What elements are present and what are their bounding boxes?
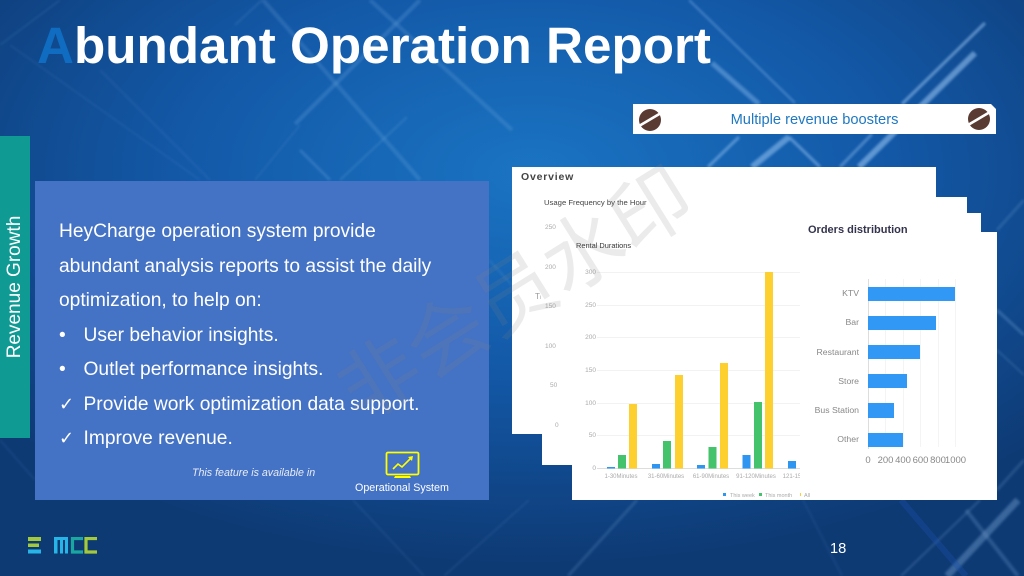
axis labels: y: 300 [585,269,596,276]
banner: Multiple revenue boosters [633,104,996,134]
value axis labels: 600 [913,455,928,466]
text block: description lines: abundant analysis reports to assist the daily [59,256,431,277]
banner: Multiple revenue boosters: Multiple revenue boosters [731,112,898,128]
axis labels: y: 150 [585,367,596,374]
page number: 18 [830,541,846,557]
side tab: Revenue Growth: Revenue Growth [4,216,25,358]
category labels [815,288,860,444]
side tab: Revenue Growth [0,136,30,438]
axis labels on sheet one: 200 [545,264,556,271]
heading: Overview: Overview [521,171,574,183]
report sheet: second layer [542,197,967,465]
heading: Usage Frequency: Usage Frequency by the Hour [544,198,647,207]
chart: orders distribution [800,224,966,499]
text block: description lines: Improve revenue. [84,428,233,449]
bars: orders [868,287,955,447]
text block: description lines: Outlet performance insights. [84,359,323,380]
category labels: KTV [842,288,859,298]
axis labels: x: 31-60Minutes [648,474,684,480]
chart: rental durations bar chart [585,269,800,499]
axis labels on sheet one: 0 [555,422,559,429]
value axis labels: 400 [895,455,911,466]
heading: Rental Durations: Rental Durations [576,241,631,250]
value axis labels [865,455,966,466]
text block: description lines: ✓ [59,394,74,415]
axis labels on sheet one: 150 [545,303,556,310]
text block: description lines: HeyCharge operation system provide [59,221,376,242]
text block: description lines [59,221,432,449]
watermark: 非会员水印 [312,134,712,444]
legend: This month [765,493,792,499]
legend [723,493,792,499]
axis labels: x: 91-120Minutes [736,474,776,480]
report sheet: usage frequency [512,167,936,434]
label: Operational System: Operational System [355,482,449,494]
category labels: Other [837,434,859,444]
heading: Orders distribution: Orders distribution [808,224,908,236]
category labels: Bar [845,317,859,327]
text block: description lines: optimization, to help on: [59,290,262,311]
bars: this month [618,402,762,468]
text block: description lines: User behavior insights. [84,325,279,346]
axis labels: x: 1-30Minutes [604,474,638,480]
axis labels: y: 250 [585,302,596,309]
bars: this week [607,455,796,468]
panel: text description [35,181,489,500]
bars: all [629,272,773,468]
axis labels: y [585,269,596,472]
axis labels: y: 200 [585,334,596,341]
note: feature availability: This feature is available in [192,467,315,479]
text fragments from lower sheets: Ti [535,292,541,301]
legend: This week [730,493,755,499]
title: Abundant Operation Report [37,17,711,74]
text block: description lines: Provide work optimization data support. [84,394,419,415]
legend fragment: All [804,493,810,499]
legend fragment [798,493,810,499]
text block: description lines: • [59,359,66,380]
report sheet: rental durations and orders [572,232,997,500]
axis labels on sheet one: 100 [545,343,556,350]
axis labels on sheet one [545,224,559,429]
value axis labels: 800 [930,455,946,466]
icon: coffee bean right [968,108,990,130]
axis labels: x [604,474,802,480]
report sheet: third layer [572,213,981,483]
category labels: Restaurant [816,347,860,357]
value axis labels: 0 [865,455,871,466]
axis labels: y: 100 [585,400,596,407]
icon: coffee bean left [639,109,661,131]
axis labels: y: 0 [592,465,596,472]
logo [28,537,97,554]
axis labels on sheet one: 250 [545,224,556,231]
category labels: Store [838,376,859,386]
icon: monitor with trend line [386,452,420,478]
text block: description lines: • [59,325,66,346]
axis labels on sheet one: 50 [550,382,557,389]
value axis labels: 1000 [945,455,966,466]
category labels: Bus Station [815,405,859,415]
value axis labels: 200 [878,455,893,466]
text block: description lines: ✓ [59,428,74,449]
axis labels: x: 61-90Minutes [693,474,729,480]
axis labels: y: 50 [589,432,596,439]
